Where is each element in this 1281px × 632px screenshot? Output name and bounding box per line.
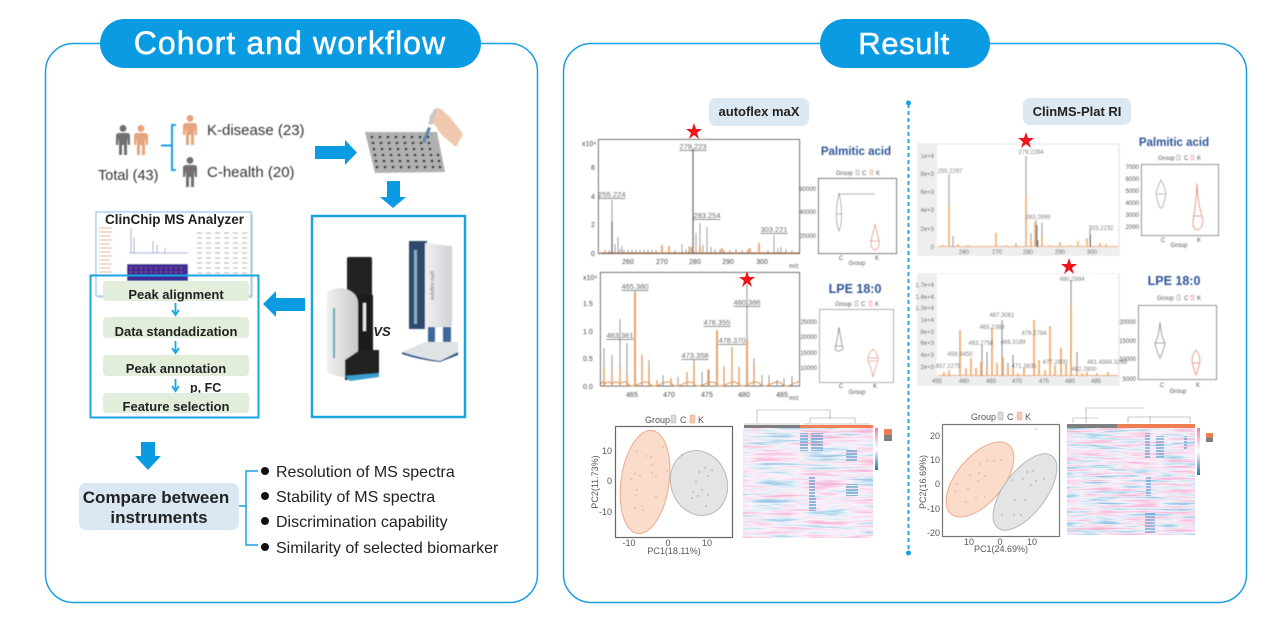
chart: ClinMS violin palmitic acid: 3000 — [1126, 213, 1140, 219]
chart: autoflex violin LPE 18:0: C — [839, 384, 844, 390]
chart: ClinMS violin LPE 18:0: LPE 18:0 — [1148, 274, 1200, 288]
heading: Result: Result — [858, 26, 950, 61]
heading: Cohort and workflow: Cohort and workflow — [134, 25, 446, 61]
chart: ClinMS spectrum palmitic acid: 290 — [1055, 250, 1066, 256]
arrow: to instruments — [380, 181, 406, 208]
chart: ClinMS spectrum LPE 18:0: 465 — [986, 379, 997, 385]
chart: ClinMS violin palmitic acid: Group — [1158, 156, 1175, 162]
screenshot: ClinChip MS Analyzer — [96, 212, 253, 298]
chart: autoflex heatmap — [743, 410, 892, 538]
chart: autoflex spectrum palmitic acid: 6 — [591, 165, 595, 172]
arrows between steps — [172, 303, 179, 391]
chart: ClinMS spectrum palmitic acid: 0 — [931, 245, 935, 251]
chart: autoflex violin palmitic acid: 60000 — [799, 187, 817, 193]
chart: ClinMS PCA: 10 — [930, 455, 940, 465]
chart: ClinMS spectrum LPE 18:0: 6e+3 — [920, 341, 935, 347]
icon: star on 480.2884 — [1061, 258, 1077, 274]
chart: ClinMS spectrum LPE 18:0: 4e+3 — [920, 353, 935, 359]
chart: ClinMS spectrum LPE 18:0: 471.3835 — [1011, 364, 1037, 370]
chart: autoflex violin LPE 18:0: 15000 — [800, 351, 818, 357]
chart: ClinMS violin palmitic acid: K — [1197, 238, 1201, 244]
chart: autoflex violin LPE 18:0: 20000 — [800, 335, 818, 341]
chart: ClinMS violin LPE 18:0: 10000 — [1119, 357, 1137, 363]
chart: ClinMS spectrum LPE 18:0: 1.4e+4 — [915, 295, 935, 301]
icon: list bracket — [239, 471, 258, 545]
icon: sample plate with pipette — [365, 108, 463, 173]
chart: ClinMS violin palmitic acid: C — [1184, 156, 1189, 162]
chart: ClinMS PCA: -10 — [927, 504, 940, 514]
chart: autoflex violin palmitic acid: C — [839, 256, 844, 262]
chart: ClinMS PCA: 0 — [935, 479, 940, 489]
chart: autoflex violin LPE 18:0: Group — [835, 302, 852, 308]
chart: ClinMS spectrum LPE 18:0: 480.2884 — [1059, 277, 1085, 283]
chart: autoflex violin LPE 18:0: K — [873, 384, 877, 390]
step: feature selection: Feature selection — [123, 399, 230, 414]
chart: ClinMS spectrum LPE 18:0: 8e+3 — [920, 330, 935, 336]
chart: ClinMS spectrum LPE 18:0: 475 — [1039, 379, 1050, 385]
chart: ClinMS spectrum LPE 18:0: 482.2800 — [1071, 367, 1097, 373]
chart: autoflex spectrum LPE 18:0: 480 — [738, 392, 750, 399]
cohort diagram — [98, 115, 305, 187]
label: ClinMS-Plat RI: ClinMS-Plat RI — [1033, 104, 1121, 119]
chart: autoflex spectrum palmitic acid: 0 — [591, 251, 595, 258]
chart: autoflex spectrum palmitic acid: 260 — [622, 259, 634, 266]
chart: ClinMS spectrum palmitic acid: 283.2699 — [1025, 215, 1051, 221]
chart: ClinMS PCA: -20 — [927, 528, 940, 538]
chart: autoflex spectrum palmitic acid: 2 — [591, 222, 595, 229]
chart: autoflex PCA: 0 — [665, 538, 671, 548]
chart: ClinMS spectrum LPE 18:0: 469.3189 — [1000, 340, 1026, 346]
panel: data processing steps — [90, 276, 258, 418]
chart: ClinMS violin LPE 18:0: 5000 — [1123, 377, 1137, 383]
chart: ClinMS spectrum LPE 18:0: 463.2758 — [968, 341, 994, 347]
chart: ClinMS spectrum LPE 18:0: 477.2800 — [1042, 360, 1068, 366]
icon: k-disease person — [183, 115, 197, 145]
chart: autoflex spectrum LPE 18:0: 485 — [776, 392, 788, 399]
chart: ClinMS PCA: K — [1025, 412, 1031, 422]
chart: autoflex spectrum LPE 18:0: 1.0 — [583, 329, 593, 336]
chart: ClinMS violin palmitic acid: 2000 — [1126, 225, 1140, 231]
chart: ClinMS spectrum palmitic acid: 260 — [959, 250, 970, 256]
chart: ClinMS spectrum palmitic acid: 279.2284 — [1018, 150, 1044, 156]
chart: autoflex PCA: 10 — [702, 538, 712, 548]
text: p, FC: p, FC — [190, 381, 221, 395]
chart: ClinMS violin palmitic acid: C — [1161, 238, 1166, 244]
chart: ClinMS violin LPE 18:0: Group — [1170, 389, 1187, 395]
icon: star on 279.223 — [686, 123, 702, 139]
chart: autoflex spectrum palmitic acid: 279.223 — [679, 142, 707, 151]
icon: c-health person — [183, 157, 197, 187]
chart: ClinMS violin LPE 18:0: K — [1196, 383, 1200, 389]
chart: ClinMS spectrum palmitic acid: 6e+3 — [920, 190, 935, 196]
chart: autoflex PCA — [590, 415, 737, 556]
chart: autoflex spectrum palmitic acid: 303.221 — [760, 225, 788, 234]
chart: ClinMS spectrum palmitic acid: 2e+3 — [920, 227, 935, 233]
chart: autoflex spectrum LPE 18:0: 465.380 — [621, 282, 649, 291]
chart: ClinMS spectrum LPE 18:0: 481.4884.3293 — [1087, 360, 1128, 366]
chart: ClinMS spectrum palmitic acid: 270 — [992, 250, 1003, 256]
chart: autoflex spectrum palmitic acid: 283.254 — [693, 211, 721, 220]
icon: autoflex instrument — [402, 241, 458, 362]
chart: autoflex PCA: K — [698, 415, 704, 425]
chart: ClinMS spectrum LPE 18:0: 460 — [959, 379, 970, 385]
panel: instruments comparison — [312, 216, 465, 417]
step: peak annotation — [103, 355, 249, 376]
panel: result — [564, 19, 1246, 602]
chart: autoflex spectrum palmitic acid: 300 — [756, 259, 768, 266]
chart: ClinMS PCA: Group — [971, 412, 996, 422]
box: compare between instruments — [79, 483, 239, 530]
label: ClinMS-Plat RI — [1023, 98, 1131, 125]
heading: Cohort and workflow — [100, 19, 481, 68]
chart: ClinMS violin palmitic acid: 7000 — [1126, 165, 1140, 171]
icon: bracket — [161, 125, 176, 170]
chart: ClinMS spectrum palmitic acid: 300 — [1087, 250, 1098, 256]
chart: autoflex PCA: C — [680, 415, 687, 425]
icon: total cohort people — [116, 125, 148, 155]
chart: autoflex spectrum LPE 18:0: 463.361 — [606, 331, 634, 340]
chart: autoflex spectrum LPE 18:0: x10⁴ — [583, 275, 597, 282]
icon: autoflex instrument: autoflex maX — [430, 270, 436, 300]
chart: autoflex spectrum palmitic acid: 255.224 — [598, 190, 626, 199]
chart: autoflex spectrum LPE 18:0: 478.370 — [718, 336, 746, 345]
chart: ClinMS spectrum LPE 18:0: 2e+3 — [920, 365, 935, 371]
chart: ClinMS spectrum palmitic acid: 280 — [1023, 250, 1034, 256]
chart: ClinMS spectrum palmitic acid: 4e+3 — [920, 208, 935, 214]
chart: ClinMS violin LPE 18:0: C — [1160, 383, 1165, 389]
chart: ClinMS violin palmitic acid: Palmitic acid — [1139, 137, 1209, 149]
chart: ClinMS spectrum LPE 18:0: 467.3061 — [989, 313, 1015, 319]
label: autoflex maX: autoflex maX — [719, 104, 800, 119]
chart: autoflex PCA: 10 — [602, 446, 612, 456]
step: peak alignment: Peak alignment — [128, 287, 224, 302]
chart: autoflex spectrum LPE 18:0: 470 — [663, 392, 675, 399]
chart: ClinMS spectrum LPE 18:0: 1e+4 — [920, 318, 935, 324]
chart: autoflex violin LPE 18:0: Group — [849, 390, 866, 396]
chart: autoflex violin palmitic acid: 20000 — [799, 234, 817, 240]
chart: ClinMS spectrum LPE 18:0: 470 — [1012, 379, 1023, 385]
chart: ClinMS spectrum palmitic acid: 8e+3 — [920, 172, 935, 178]
chart: ClinMS heatmap — [1067, 408, 1213, 535]
chart: ClinMS violin palmitic acid: 4000 — [1126, 201, 1140, 207]
chart: autoflex spectrum LPE 18:0: m/z — [789, 396, 799, 402]
chart: autoflex violin LPE 18:0: C — [861, 302, 866, 308]
chart: autoflex violin palmitic acid: C — [862, 171, 867, 177]
chart: autoflex PCA: -10 — [599, 507, 612, 517]
chart: autoflex spectrum palmitic acid: 280 — [689, 259, 701, 266]
chart: ClinMS spectrum LPE 18:0: 1.7e+4 — [915, 283, 935, 289]
chart: ClinMS violin palmitic acid — [1126, 137, 1218, 249]
chart: autoflex violin LPE 18:0: K — [875, 302, 879, 308]
chart: ClinMS PCA: PC1(24.69%) — [974, 544, 1028, 554]
chart: ClinMS spectrum palmitic acid: 1e+4 — [920, 154, 935, 160]
divider between instruments — [906, 100, 911, 556]
chart: autoflex spectrum palmitic acid — [582, 140, 800, 270]
chart: autoflex spectrum palmitic acid: 290 — [722, 259, 734, 266]
chart: ClinMS PCA: 10 — [964, 537, 974, 547]
icon: ClinMS instrument — [327, 257, 379, 381]
list: comparison criteria — [261, 464, 499, 557]
chart: ClinMS spectrum palmitic acid: 303.2232 — [1088, 226, 1114, 232]
chart: autoflex PCA: PC1(18.11%) — [647, 546, 701, 556]
heading: Result — [820, 19, 990, 68]
box: compare between instruments: instruments — [110, 508, 208, 527]
chart: autoflex spectrum LPE 18:0: 0.5 — [583, 356, 593, 363]
chart: ClinMS PCA: PC2(16.69%) — [918, 455, 928, 509]
chart: autoflex violin LPE 18:0: LPE 18:0 — [829, 282, 881, 296]
chart: autoflex spectrum LPE 18:0: 480.386 — [733, 298, 761, 307]
list: comparison criteria: Stability of MS spectra — [276, 489, 435, 506]
chart: ClinMS violin palmitic acid: K — [1197, 156, 1201, 162]
step: feature selection — [103, 393, 249, 414]
chart: ClinMS PCA: C — [1007, 412, 1014, 422]
chart: ClinMS PCA: 20 — [930, 431, 940, 441]
list: comparison criteria: Discrimination capability — [276, 514, 448, 531]
chart: ClinMS spectrum palmitic acid: 255.2297 — [937, 169, 963, 175]
chart: autoflex violin palmitic acid: Palmitic acid — [821, 146, 891, 158]
chart: ClinMS spectrum LPE 18:0: 485 — [1091, 379, 1102, 385]
chart: autoflex spectrum LPE 18:0 — [583, 272, 800, 402]
chart: autoflex PCA: Group — [645, 415, 670, 425]
chart: autoflex violin LPE 18:0: 10000 — [800, 366, 818, 372]
text: analyzer title: ClinChip MS Analyzer — [105, 212, 245, 227]
text: c-health: C-health (20) — [207, 164, 295, 181]
chart: ClinMS PCA: 10 — [1027, 537, 1037, 547]
chart: ClinMS spectrum LPE 18:0 — [915, 273, 1128, 386]
chart: autoflex spectrum palmitic acid: 4 — [591, 194, 595, 201]
arrow: to analysis — [263, 291, 305, 317]
chart: ClinMS violin palmitic acid: 6000 — [1126, 177, 1140, 183]
chart: autoflex spectrum LPE 18:0: 0.0 — [583, 384, 593, 391]
chart: autoflex spectrum LPE 18:0: 1.5 — [583, 301, 593, 308]
chart: ClinMS PCA — [918, 412, 1069, 554]
text: total: Total (43) — [98, 168, 158, 184]
arrow: to sample plate — [315, 140, 357, 165]
chart: ClinMS violin LPE 18:0: Group — [1157, 296, 1174, 302]
chart: ClinMS spectrum LPE 18:0: 465.2383 — [979, 325, 1005, 331]
chart: autoflex violin palmitic acid — [799, 146, 896, 267]
chart: autoflex spectrum palmitic acid: 270 — [656, 259, 668, 266]
chart: ClinMS spectrum LPE 18:0: 1.2e+4 — [915, 306, 935, 312]
step: data standadization — [103, 317, 249, 339]
text: k-disease: K-disease (23) — [207, 122, 305, 139]
arrow: to comparison — [135, 442, 161, 470]
chart: autoflex violin palmitic acid: 40000 — [799, 210, 817, 216]
chart: autoflex PCA: 0 — [607, 476, 612, 486]
chart: ClinMS violin LPE 18:0: C — [1184, 296, 1189, 302]
chart: autoflex PCA: -10 — [622, 538, 636, 548]
icon: star on 480.386 — [739, 271, 755, 287]
chart: ClinMS PCA: 0 — [997, 537, 1003, 547]
chart: ClinMS violin palmitic acid: Group — [1171, 243, 1188, 249]
chart: autoflex spectrum LPE 18:0: 476.355 — [703, 318, 731, 327]
step: peak alignment — [103, 281, 249, 302]
chart: autoflex violin palmitic acid: K — [876, 171, 880, 177]
box: compare between instruments: Compare between — [83, 488, 229, 507]
chart: autoflex violin LPE 18:0: 25000 — [800, 320, 818, 326]
chart: ClinMS violin LPE 18:0: K — [1197, 296, 1201, 302]
chart: ClinMS violin LPE 18:0: 15000 — [1119, 339, 1137, 345]
chart: ClinMS violin LPE 18:0: 20000 — [1119, 320, 1137, 326]
chart: ClinMS spectrum LPE 18:0: 476.2784 — [1021, 331, 1047, 337]
chart: autoflex violin LPE 18:0 — [800, 282, 894, 396]
panel: cohort and workflow — [46, 19, 538, 602]
chart: ClinMS spectrum LPE 18:0: 457.2275 — [935, 364, 961, 370]
chart: autoflex violin palmitic acid: Group — [849, 261, 866, 267]
chart: autoflex spectrum palmitic acid: m/z — [789, 264, 799, 270]
chart: autoflex violin palmitic acid: Group — [836, 171, 853, 177]
chart: autoflex PCA: PC2(11.73%) — [590, 455, 600, 509]
text: VS: VS — [373, 324, 391, 339]
chart: ClinMS spectrum LPE 18:0: 459.3450 — [947, 352, 973, 358]
list: comparison criteria: Resolution of MS spectra — [276, 464, 455, 481]
list: comparison criteria: Similarity of selected biomarker — [276, 540, 499, 557]
chart: autoflex spectrum LPE 18:0: 475 — [701, 392, 713, 399]
chart: ClinMS spectrum LPE 18:0: 455 — [932, 379, 943, 385]
label: autoflex maX — [709, 98, 809, 126]
step: data standadization: Data standadization — [115, 324, 237, 339]
step: peak annotation: Peak annotation — [126, 361, 226, 376]
chart: ClinMS violin LPE 18:0 — [1119, 274, 1216, 395]
chart: ClinMS violin palmitic acid: 5000 — [1126, 189, 1140, 195]
chart: autoflex spectrum LPE 18:0: 473.358 — [681, 351, 709, 360]
icon: star on 279.2284 — [1018, 132, 1034, 148]
chart: ClinMS spectrum palmitic acid — [917, 143, 1120, 256]
chart: autoflex violin palmitic acid: K — [875, 256, 879, 262]
chart: ClinMS spectrum LPE 18:0: 480 — [1065, 379, 1076, 385]
chart: autoflex spectrum palmitic acid: x10⁴ — [582, 141, 596, 148]
chart: autoflex spectrum LPE 18:0: 465 — [626, 392, 638, 399]
